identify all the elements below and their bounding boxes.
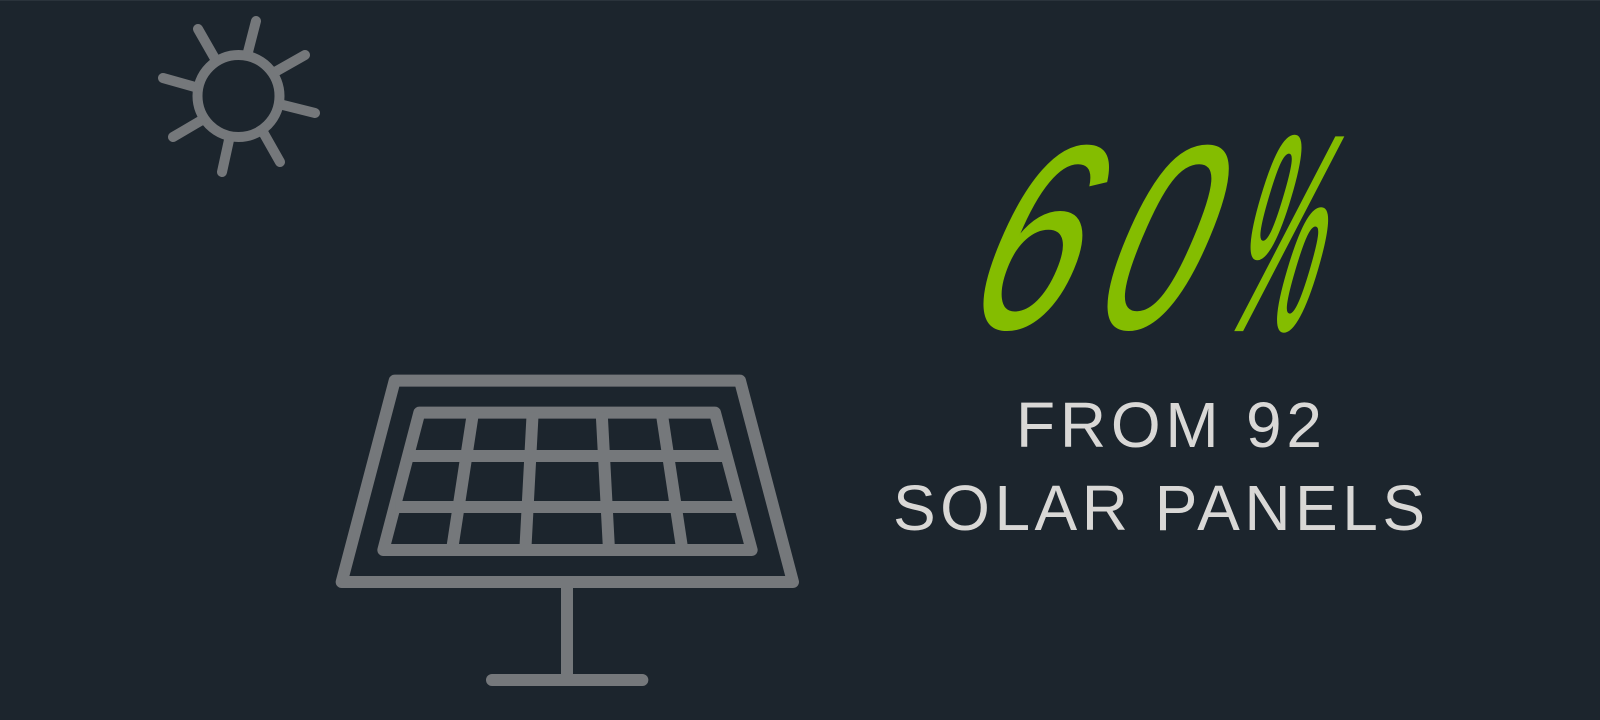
statistic: 60% bbox=[932, 79, 1377, 388]
icon: sun bbox=[163, 21, 315, 172]
caption: SOLAR PANELS bbox=[893, 472, 1425, 544]
caption bbox=[893, 389, 1425, 544]
caption: FROM 92 bbox=[1016, 389, 1322, 461]
statistic: 60%: % bbox=[1201, 79, 1377, 388]
icon: solar panel bbox=[342, 381, 793, 680]
statistic: 60%: 0 bbox=[1059, 91, 1278, 384]
statistic: 60%: 6 bbox=[932, 91, 1156, 384]
